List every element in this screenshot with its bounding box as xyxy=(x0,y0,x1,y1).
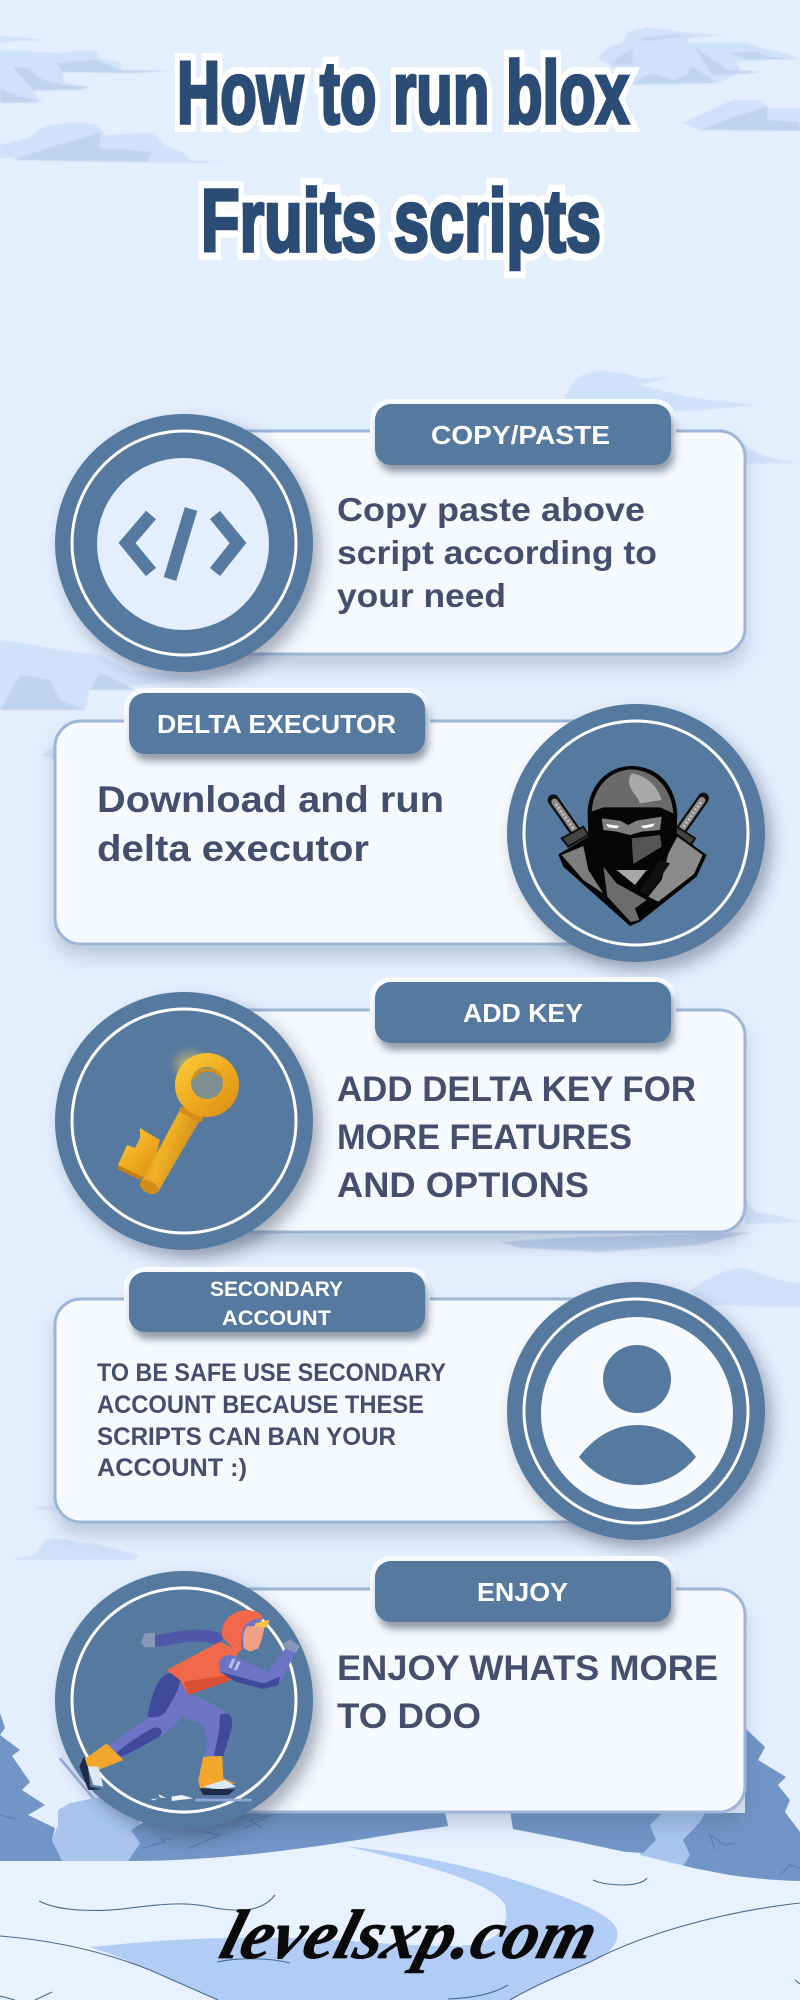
circle icon: ice skater xyxy=(55,1571,313,1829)
card: delta executor xyxy=(55,721,645,944)
text: copy paste above xyxy=(337,491,657,614)
label pill: ENJOY xyxy=(370,1556,676,1624)
title xyxy=(177,43,629,270)
circle icon: user silhouette xyxy=(507,1282,765,1540)
text: to be safe: ACCOUNT :) xyxy=(97,1454,247,1482)
text: add delta key xyxy=(337,1070,696,1205)
text: download and run: delta executor xyxy=(97,828,369,869)
text: enjoy whats more: TO DOO xyxy=(337,1697,481,1736)
label pill: ADD KEY: ADD KEY xyxy=(463,998,583,1028)
card: enjoy xyxy=(170,1589,745,1812)
footer site name: levelsxp.com xyxy=(212,1897,607,1974)
step 2: delta executor xyxy=(55,688,765,962)
text: to be safe: SCRIPTS CAN BAN YOUR xyxy=(97,1423,396,1451)
text: copy paste above: Copy paste above xyxy=(337,491,645,528)
text: download and run xyxy=(97,779,444,869)
text: copy paste above: your need xyxy=(337,577,506,614)
title: Fruits scripts xyxy=(201,171,601,270)
text: to be safe xyxy=(97,1359,446,1482)
label pill: COPY/PASTE xyxy=(370,399,676,467)
snowy landscape with trees xyxy=(0,1713,800,2000)
label pill: SECONDARY ACCOUNT xyxy=(124,1267,430,1334)
circle icon: golden key xyxy=(55,992,313,1250)
background clouds xyxy=(0,27,800,1560)
text: add delta key: AND OPTIONS xyxy=(337,1166,589,1205)
card: copy/paste xyxy=(170,431,745,654)
step 3: add key xyxy=(55,977,745,1250)
text: enjoy whats more xyxy=(337,1649,718,1736)
label pill: COPY/PASTE: COPY/PASTE xyxy=(431,420,610,450)
label pill: ADD KEY xyxy=(370,977,676,1045)
text: add delta key: MORE FEATURES xyxy=(337,1118,632,1157)
text: to be safe: TO BE SAFE USE SECONDARY xyxy=(97,1359,446,1387)
label pill: SECONDARY ACCOUNT: SECONDARY xyxy=(210,1278,343,1301)
card: secondary account xyxy=(55,1299,645,1522)
label pill: ENJOY: ENJOY xyxy=(477,1577,568,1607)
card: add key xyxy=(170,1010,745,1232)
text: add delta key: ADD DELTA KEY FOR xyxy=(337,1070,696,1109)
step 4: secondary account xyxy=(55,1267,765,1540)
step 1: copy/paste xyxy=(55,399,745,672)
title: Fruits scripts xyxy=(201,171,601,270)
label pill: DELTA EXECUTOR: DELTA EXECUTOR xyxy=(157,709,396,739)
label pill: SECONDARY ACCOUNT: ACCOUNT xyxy=(222,1307,331,1330)
text: to be safe: ACCOUNT BECAUSE THESE xyxy=(97,1391,424,1419)
label pill: DELTA EXECUTOR xyxy=(124,688,430,756)
step 5: enjoy xyxy=(55,1556,745,1829)
text: download and run: Download and run xyxy=(97,779,444,820)
circle icon: code brackets xyxy=(55,414,313,672)
text: copy paste above: script according to xyxy=(337,534,657,571)
text: enjoy whats more: ENJOY WHATS MORE xyxy=(337,1649,718,1688)
circle icon: ninja xyxy=(507,704,765,962)
